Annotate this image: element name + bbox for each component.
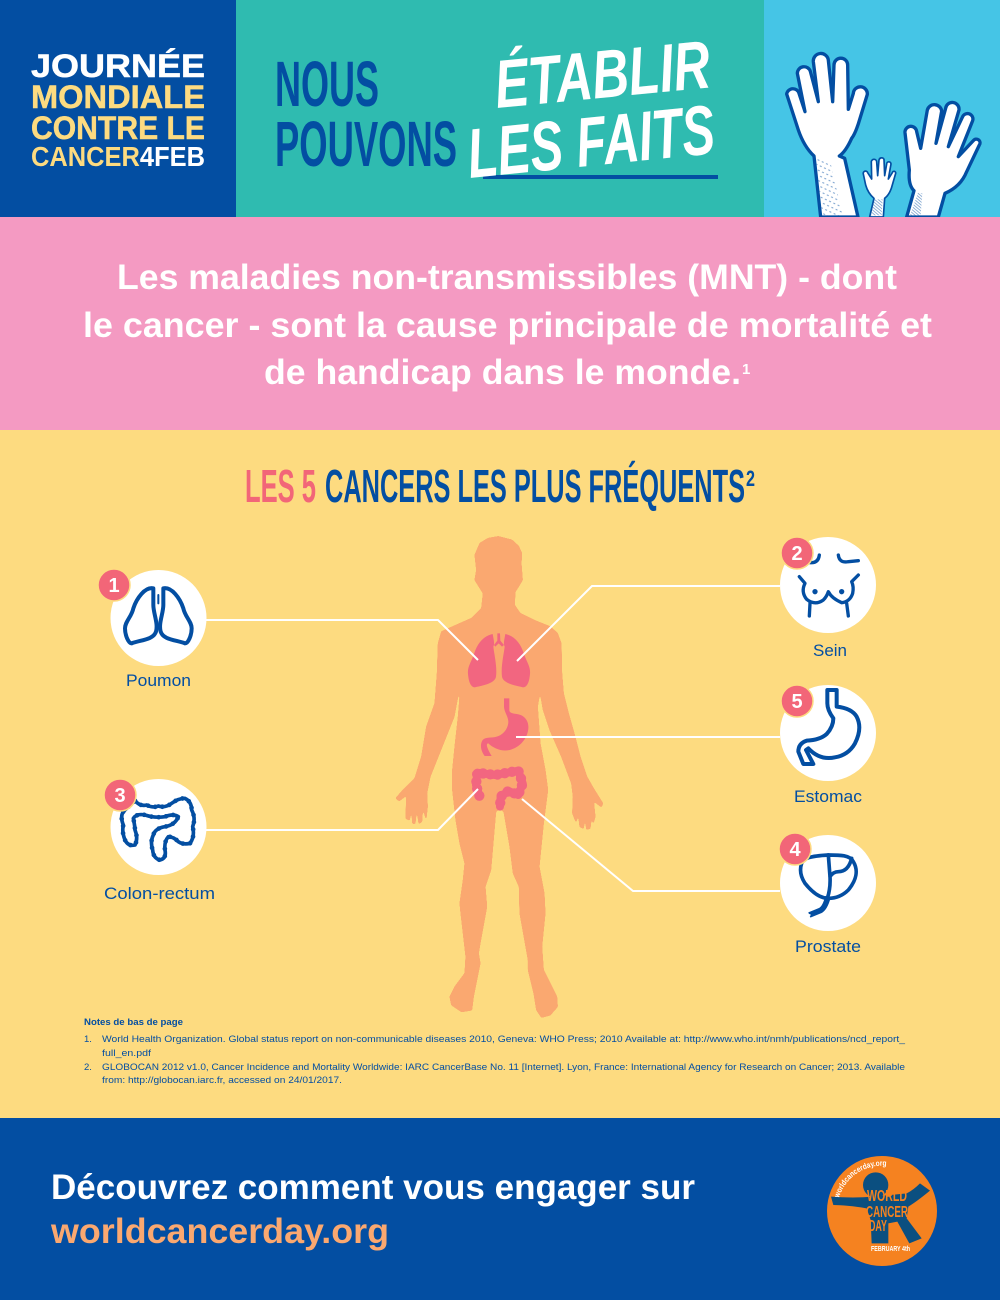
badge 3: 3 [114, 785, 126, 807]
panel: event title: CANCER4FEB [31, 141, 205, 172]
body silhouette [396, 537, 603, 1017]
footnotes: World Health Organization. Global status report on non-communicable diseases 2010, Geneva: WHO Press; 2010 Available at: http://www.who.int/nmh/publications/ncd_report_ [102, 1034, 906, 1045]
organ: lungs [468, 633, 530, 687]
panel: call to action footer: Découvrez comment vous engager sur [51, 1168, 695, 1207]
logo: world cancer day: worldcancerday.org [834, 1161, 886, 1198]
footnotes: full_en.pdf [102, 1048, 151, 1059]
heading: five most frequent cancers [245, 460, 755, 512]
heading: five most frequent cancers: LES 5 [245, 460, 316, 512]
panel: intro statement [0, 217, 1000, 430]
label: lung: Poumon [126, 671, 191, 690]
connector lines [206, 586, 780, 891]
logo: world cancer day: FEBRUARY 4th [871, 1246, 910, 1253]
logo: world cancer day [827, 1156, 937, 1266]
footnotes: from: http://globocan.iarc.fr, accessed on 24/01/2017. [102, 1075, 342, 1086]
panel: top cancers background [0, 430, 1000, 1118]
panel: slogan: NOUS [275, 48, 379, 120]
panel: raised hands [764, 0, 1000, 217]
logo: world cancer day: WORLD [867, 1188, 907, 1205]
panel: slogan: ÉTABLIR [491, 27, 713, 123]
badge 1: 1 [108, 575, 120, 597]
logo: world cancer day: DAY [869, 1218, 887, 1235]
panel: slogan: POUVONS [275, 108, 457, 180]
organ: colon [476, 771, 523, 807]
panel: slogan [236, 0, 764, 217]
badge 4: 4 [789, 839, 801, 861]
panel: intro statement: 1 [742, 361, 750, 378]
panel: event title: CONTRE LE [31, 110, 205, 146]
panel: event title: MONDIALE [31, 79, 205, 115]
organ: stomach [481, 698, 528, 756]
footnotes: 1. [84, 1034, 92, 1045]
logo: world cancer day: CANCER [866, 1204, 908, 1221]
label: colon-rectum: Colon-rectum [104, 884, 215, 903]
label: breast: Sein [813, 641, 847, 660]
footnotes: 2. [84, 1062, 92, 1073]
panel: call to action footer: worldcancerday.org [50, 1212, 389, 1251]
footnotes: GLOBOCAN 2012 v1.0, Cancer Incidence and Mortality Worldwide: IARC CancerBase No. 11 [Internet]. Lyon, France: International Agency for Research on Cancer; 2013. Available [102, 1062, 905, 1073]
panel: slogan: LES FAITS [464, 90, 718, 193]
panel: event title: JOURNÉE [31, 48, 205, 84]
footnotes: Notes de bas de page [84, 1017, 183, 1028]
icon: prostate [779, 833, 876, 931]
badge 5: 5 [791, 691, 803, 713]
icon: lung [98, 569, 206, 666]
icon: breast [780, 537, 876, 633]
icon: stomach [780, 685, 876, 781]
badge 2: 2 [791, 543, 803, 565]
label: prostate: Prostate [795, 937, 861, 956]
footnotes [84, 1017, 906, 1086]
panel: intro statement: Les maladies non-transmissibles (MNT) - dont [117, 258, 897, 297]
panel: event title [0, 0, 236, 217]
label: stomach: Estomac [794, 787, 863, 806]
human body with organs [396, 537, 603, 1017]
panel: intro statement: de handicap dans le monde. [264, 353, 741, 392]
heading: five most frequent cancers: 2 [746, 466, 755, 491]
panel: call to action footer [0, 1118, 1000, 1300]
panel: intro statement: le cancer - sont la cause principale de mortalité et [83, 306, 932, 345]
icon: colon-rectum [104, 779, 206, 875]
